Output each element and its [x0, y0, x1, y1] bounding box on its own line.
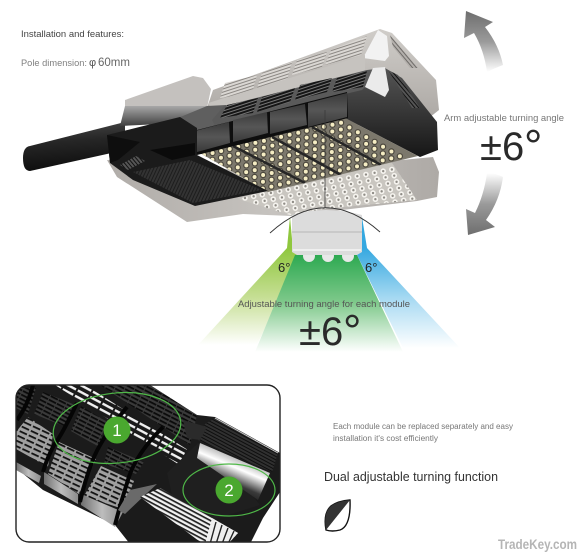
street lamp illustration [23, 29, 470, 222]
module cross-section [292, 210, 362, 262]
photo panel: module close-up [16, 385, 280, 544]
right vent block [198, 418, 278, 472]
heading: dual adjustable turning function: Dual adjustable turning function [324, 470, 498, 484]
module angle value: ±6 [299, 310, 343, 354]
module angle value: ° [343, 305, 361, 357]
front LED panel [201, 118, 418, 192]
arrow: turn up [464, 11, 503, 72]
knuckle [183, 420, 207, 440]
glossy end cap [197, 443, 270, 500]
front black modules [193, 92, 348, 155]
arm angle value: ±6 [480, 125, 524, 169]
highlighted vent band [55, 385, 188, 464]
silver hinge [118, 484, 157, 514]
left 6 degree label: 6° [278, 260, 290, 275]
label: adjustable turning angle: Adjustable turning angle for each module [238, 299, 410, 310]
silver edge strips [16, 462, 41, 483]
text: pole dimension: Pole dimension: [21, 58, 87, 69]
module pivot line [324, 110, 326, 208]
upper vent row [34, 392, 73, 427]
rear grey housing [207, 29, 439, 125]
lower grey body [107, 157, 439, 222]
rear LED panel [242, 162, 417, 215]
description text: installation it's cost efficiently [333, 434, 438, 443]
callout 1 badge: 1 [112, 421, 122, 440]
dark lamp body [16, 385, 280, 544]
description text: Each module can be replaced separately and easy [333, 422, 513, 431]
arrow: turn down [466, 173, 503, 235]
text: pole dimension: 60mm [98, 57, 130, 69]
module divider curves [17, 385, 163, 525]
black mount housing [107, 117, 268, 206]
left mount block [120, 76, 226, 133]
callout 1 ring [50, 387, 184, 469]
right 6 degree label: 6° [365, 260, 377, 275]
text: pole dimension: φ [89, 57, 96, 69]
icon: leaf [325, 500, 350, 531]
callout 2 ring [183, 464, 275, 516]
pivot arc [270, 208, 380, 233]
side grey vent modules [16, 417, 53, 467]
black housing right end [345, 67, 438, 157]
black vent row [212, 68, 400, 135]
label: arm adjustable turning angle: Arm adjustable turning angle [444, 113, 564, 124]
central dark block [177, 458, 182, 464]
white striped piece [140, 488, 238, 544]
callout 2 badge: 2 [224, 481, 234, 500]
pole [23, 122, 125, 171]
arm angle value: ° [524, 120, 542, 172]
light beams [198, 217, 460, 352]
callout 2 badge [216, 476, 242, 504]
callout 1 badge [104, 416, 130, 444]
heading: installation and features: Installation and features: [21, 29, 124, 40]
